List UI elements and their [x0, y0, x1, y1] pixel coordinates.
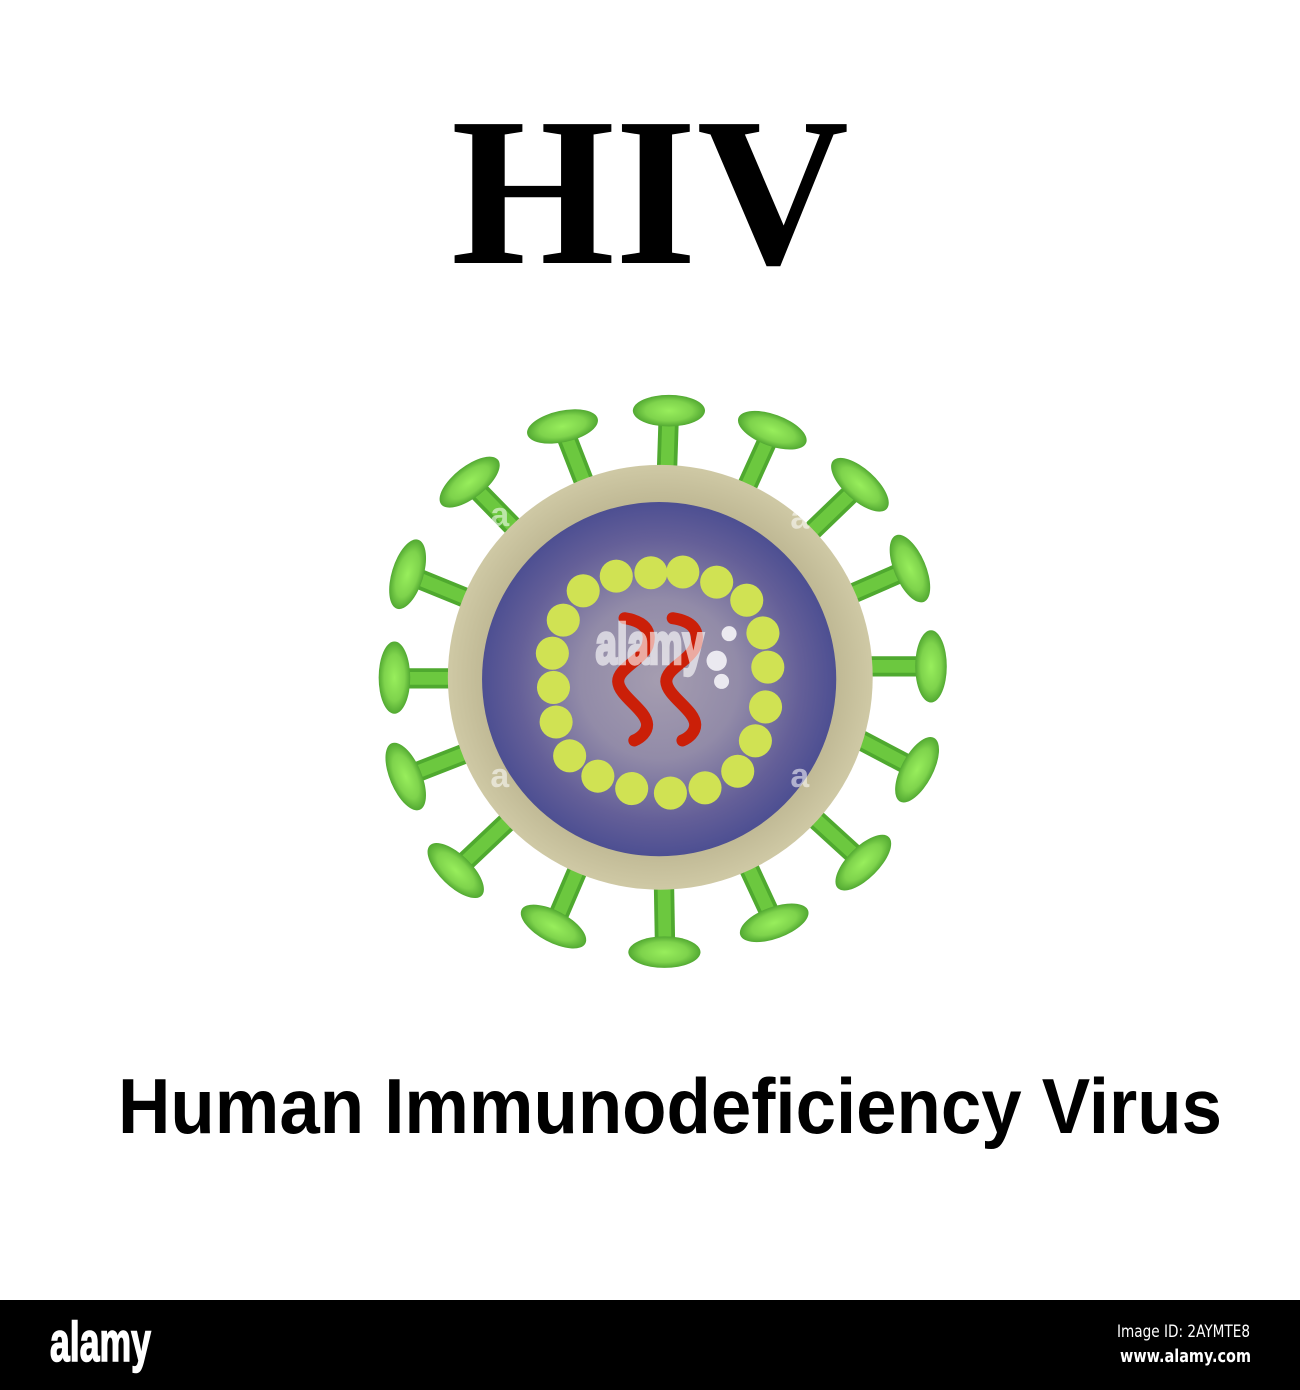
spike: left lower [377, 677, 660, 816]
watermark: alamy: alamy [596, 612, 704, 675]
capsid beads [536, 555, 784, 810]
spike: right [660, 630, 947, 702]
subtitle: Human Immunodeficiency Virus [118, 1062, 1222, 1150]
inner core [482, 502, 836, 856]
footer bar [0, 1300, 1300, 1390]
title: HIV [451, 74, 849, 309]
watermark marks: a [490, 757, 510, 795]
virus diagram [377, 395, 948, 968]
website: www.alamy.com [1120, 1346, 1251, 1367]
spike: left upper [382, 535, 660, 677]
spike: lower left 2 [419, 677, 660, 907]
watermark marks [490, 496, 810, 795]
watermark marks: a [790, 757, 810, 795]
spike: lower right 2 [660, 677, 900, 899]
spikes [377, 395, 948, 968]
spike: right lower [660, 634, 948, 809]
spike: bottom [628, 677, 701, 968]
footer logo: alamy [50, 1310, 151, 1373]
watermark marks: a [490, 496, 510, 534]
spike: left [379, 642, 660, 714]
image id: Image ID: 2AYMTE8 [1117, 1322, 1250, 1342]
enzyme dots [707, 626, 737, 689]
RNA strands [618, 618, 697, 740]
spike: upper left 2 [431, 447, 660, 677]
spike: right upper [660, 529, 939, 677]
watermark marks: a [790, 498, 810, 536]
spike: top [633, 395, 705, 677]
outer envelope [448, 465, 873, 890]
spike: lower right 1 [660, 677, 814, 950]
spike: upper left 1 [524, 404, 660, 677]
spike: upper right 2 [660, 449, 897, 677]
spike: upper right 1 [660, 403, 812, 677]
spike: lower left 1 [514, 677, 660, 957]
